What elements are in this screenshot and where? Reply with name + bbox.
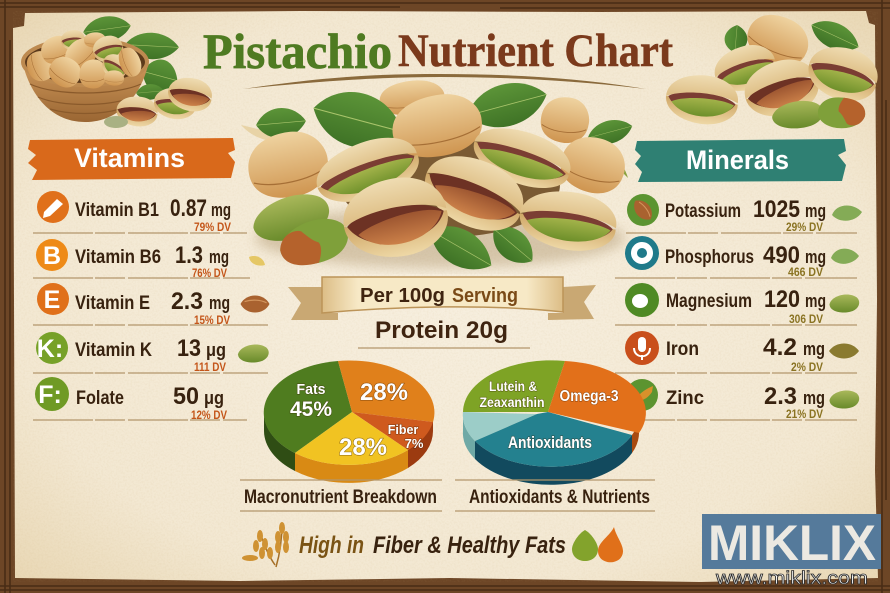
row: iron <box>615 331 859 374</box>
caption: antioxidants and nutrients: Antioxidants & Nutrients <box>469 487 650 508</box>
watermark logo: www.miklix.com <box>715 568 868 588</box>
row: folate: F: <box>38 381 62 409</box>
row: folate: μg <box>204 388 224 408</box>
row: vitamin B1: 0.87 <box>170 195 207 222</box>
slice: fiber 7% <box>352 412 433 451</box>
chart: macronutrient pie <box>264 360 434 483</box>
row: folate: Folate <box>76 388 124 409</box>
row: vitamin E: 15% DV <box>194 315 230 327</box>
row: vitamin B6: B <box>43 242 61 270</box>
row: vitamin K: Vitamin K <box>75 340 152 361</box>
slice: fiber 7%: Fiber <box>388 423 418 437</box>
ribbon: per 100g serving <box>288 277 596 320</box>
row: phosphorus: 466 DV <box>788 267 823 279</box>
slice: pale teal <box>463 412 537 441</box>
heading banner: vitamins <box>28 138 235 180</box>
slice: lutein & zeaxanthin <box>463 360 565 412</box>
illustration: central pistachio pile <box>241 74 635 281</box>
row: potassium: 29% DV <box>786 222 823 234</box>
row: iron: 4.2 <box>763 334 797 361</box>
title swoosh <box>243 74 646 89</box>
row: vitamin B6: mg <box>209 247 229 267</box>
title <box>203 23 673 79</box>
row: iron: Iron <box>666 339 699 360</box>
illustration: pistachios top right <box>664 5 883 132</box>
caption: macronutrient breakdown <box>240 480 442 511</box>
heading banner: minerals <box>635 139 846 182</box>
slice: antioxidants: Antioxidants <box>508 434 592 452</box>
row: vitamin E: Vitamin E <box>75 293 150 314</box>
slice: 28% yellow <box>295 412 408 465</box>
row: phosphorus: 490 <box>763 242 800 269</box>
footer slogan <box>299 532 566 559</box>
row: zinc <box>615 379 859 421</box>
row: folate: 12% DV <box>191 410 227 422</box>
footer slogan: Fiber & Healthy Fats <box>373 532 566 559</box>
row: magnesium <box>615 283 859 326</box>
row: vitamin E: mg <box>209 293 230 313</box>
slice: lutein & zeaxanthin: Zeaxanthin <box>480 394 544 410</box>
panel: minerals <box>615 139 862 421</box>
row: phosphorus: Phosphorus <box>665 247 754 268</box>
slice: fats 45%: Fats <box>296 381 326 398</box>
slice: omega-3 <box>548 361 646 433</box>
row: zinc: Zinc <box>666 388 704 409</box>
slice: fiber 7%: 7% <box>405 436 424 451</box>
slice: 28% yellow: 28% <box>339 434 387 461</box>
row: phosphorus <box>615 236 859 279</box>
chart: antioxidants pie <box>463 360 646 485</box>
row: iron: 2% DV <box>791 362 823 374</box>
icon: wheat <box>242 522 289 567</box>
row: vitamin B1: 79% DV <box>194 222 231 234</box>
row: vitamin B1: Vitamin B1 <box>75 200 159 221</box>
row: phosphorus: mg <box>805 247 826 267</box>
row: vitamin K: 13 <box>177 335 201 362</box>
pie side walls <box>463 412 639 485</box>
row: zinc: 2.3 <box>764 383 797 410</box>
panel: vitamins <box>28 138 270 422</box>
row: vitamin K: K: <box>37 335 63 363</box>
row: vitamin B6 <box>33 239 265 280</box>
row: folate: 50 <box>173 383 199 410</box>
row: folate <box>33 377 247 422</box>
footer slogan: High in <box>299 532 364 559</box>
illustration: basket of pistachios <box>22 13 215 128</box>
ribbon: per 100g serving: Per 100g <box>360 285 445 307</box>
row: magnesium: 120 <box>764 286 800 313</box>
caption: antioxidants and nutrients <box>455 480 655 511</box>
row: zinc: 21% DV <box>786 409 823 421</box>
row: iron: mg <box>803 339 825 359</box>
row: vitamin E <box>33 283 270 327</box>
caption: macronutrient breakdown: Macronutrient Breakdown <box>244 487 437 508</box>
row: potassium: mg <box>805 201 826 221</box>
row: magnesium: 306 DV <box>789 314 823 326</box>
row: magnesium: mg <box>805 291 826 311</box>
icon: oil drops <box>572 527 623 562</box>
slice: lutein & zeaxanthin: Lutein & <box>489 379 537 394</box>
title: Pistachio <box>203 23 392 79</box>
row: vitamin B6: Vitamin B6 <box>75 247 161 268</box>
heading banner: minerals: Minerals <box>686 145 789 175</box>
ribbon: per 100g serving: Serving <box>452 285 518 307</box>
row: vitamin E: 2.3 <box>171 288 203 315</box>
row: magnesium: Magnesium <box>666 291 752 312</box>
row: zinc: mg <box>803 388 825 408</box>
protein label: Protein 20g <box>375 317 508 344</box>
row: vitamin K <box>33 332 269 374</box>
watermark logo: MIKLIX <box>708 515 876 571</box>
slice: 28% orange <box>338 360 434 422</box>
slice: 28% orange: 28% <box>360 379 408 406</box>
row: vitamin B6: 76% DV <box>192 268 227 280</box>
row: potassium <box>626 194 862 234</box>
slice: fats 45%: 45% <box>290 398 332 421</box>
slice: omega-3: Omega-3 <box>560 388 619 405</box>
row: potassium: 1025 <box>753 196 800 223</box>
pie side walls <box>264 413 433 483</box>
row: vitamin B1 <box>33 191 247 234</box>
row: vitamin E: E <box>44 286 60 314</box>
row: vitamin K: μg <box>206 340 226 360</box>
row: vitamin B1: mg <box>211 200 231 220</box>
slice: fats 45% <box>264 361 352 453</box>
row: vitamin B6: 1.3 <box>175 242 203 269</box>
row: vitamin K: 111 DV <box>194 362 226 374</box>
title: Nutrient Chart <box>398 25 673 77</box>
slice: antioxidants <box>475 412 632 467</box>
row: potassium: Potassium <box>665 201 741 222</box>
heading banner: vitamins: Vitamins <box>74 143 185 173</box>
